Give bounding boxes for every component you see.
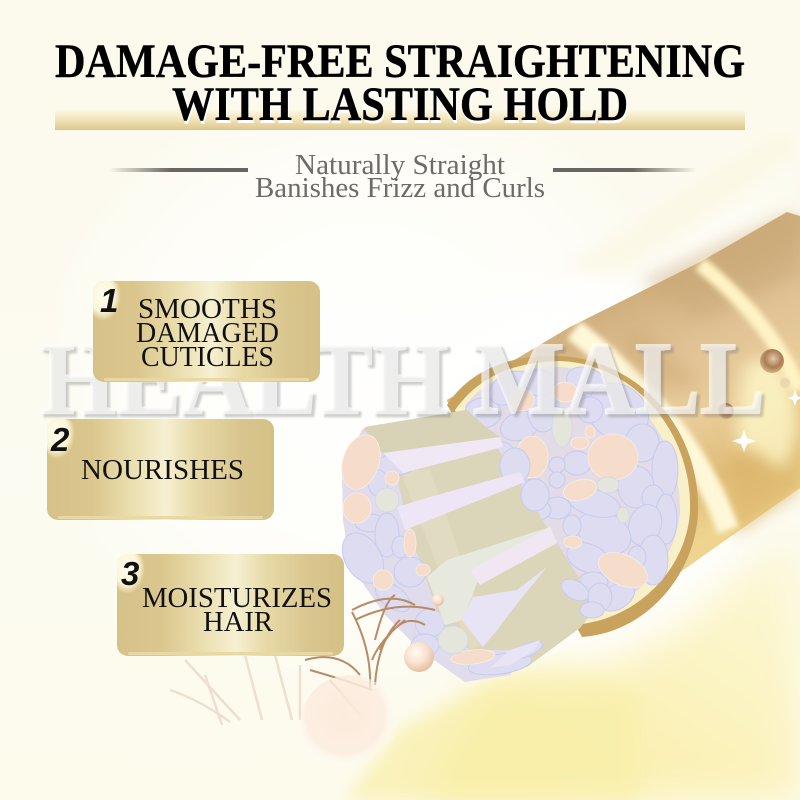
hair strand illustration [170, 212, 800, 775]
number badge 2: 2 [50, 421, 70, 458]
card 1 label: DAMAGED [136, 318, 279, 349]
card 2 label: NOURISHES [81, 455, 244, 486]
small bead [718, 403, 734, 419]
benefit card 1 [93, 281, 320, 382]
subtitle left rule [108, 168, 248, 172]
card 1 label [136, 294, 279, 373]
gold hair shaft [447, 212, 800, 636]
large bead [760, 349, 784, 373]
subtitle [108, 149, 697, 204]
outer cuticle pebbles on wedge [334, 430, 612, 678]
inner pale ring [455, 361, 690, 625]
card 1 label: SMOOTHS [138, 294, 277, 325]
lavender pebbles [465, 362, 678, 617]
cross-section face [465, 367, 680, 612]
lavender cuticle pebbles [334, 448, 612, 678]
pearl [404, 642, 434, 672]
subtitle right rule [553, 168, 697, 172]
peach cuticle pebbles [335, 430, 496, 666]
title line 2: WITH LASTING HOLD [172, 78, 628, 131]
number badge 2 [47, 419, 75, 459]
number badge 1: 1 [100, 282, 118, 319]
soft glow around strand [370, 290, 750, 670]
watermark [40, 321, 768, 439]
number badge 3: 3 [121, 555, 139, 592]
hair fibres [383, 437, 557, 668]
lavender base of cuticle layer [342, 428, 530, 682]
benefit card 3 [117, 554, 344, 656]
number badge 1 [93, 281, 121, 321]
subtitle line 1: Naturally Straight [295, 149, 505, 181]
outer ring of cross-section [447, 356, 698, 637]
sage pebbles [552, 407, 629, 523]
title underline bar [55, 110, 745, 130]
card 3 label: MOISTURIZES [142, 583, 332, 614]
number badge 3 [117, 554, 145, 594]
sage cuticle pebbles [375, 488, 468, 654]
title [55, 35, 745, 131]
peach pebbles [510, 382, 653, 595]
cut wedge of hair shaft [342, 410, 597, 682]
cross-section pebbles [465, 362, 678, 617]
watermark shadow: HEALTH MALL [43, 324, 768, 439]
subtitle line 2: Banishes Frizz and Curls [255, 172, 545, 204]
watermark text: HEALTH MALL [40, 321, 765, 436]
card 1 label: CUTICLES [141, 342, 274, 373]
small pearl [432, 594, 444, 606]
card 3 label: HAIR [203, 607, 273, 638]
beads and sparkles on shaft [718, 349, 800, 452]
benefit card 2 [47, 419, 274, 520]
card 3 label [142, 583, 332, 638]
blurred pearl [300, 675, 400, 775]
rose-gold sprig with pearls [170, 594, 444, 775]
sparkle [732, 430, 756, 452]
